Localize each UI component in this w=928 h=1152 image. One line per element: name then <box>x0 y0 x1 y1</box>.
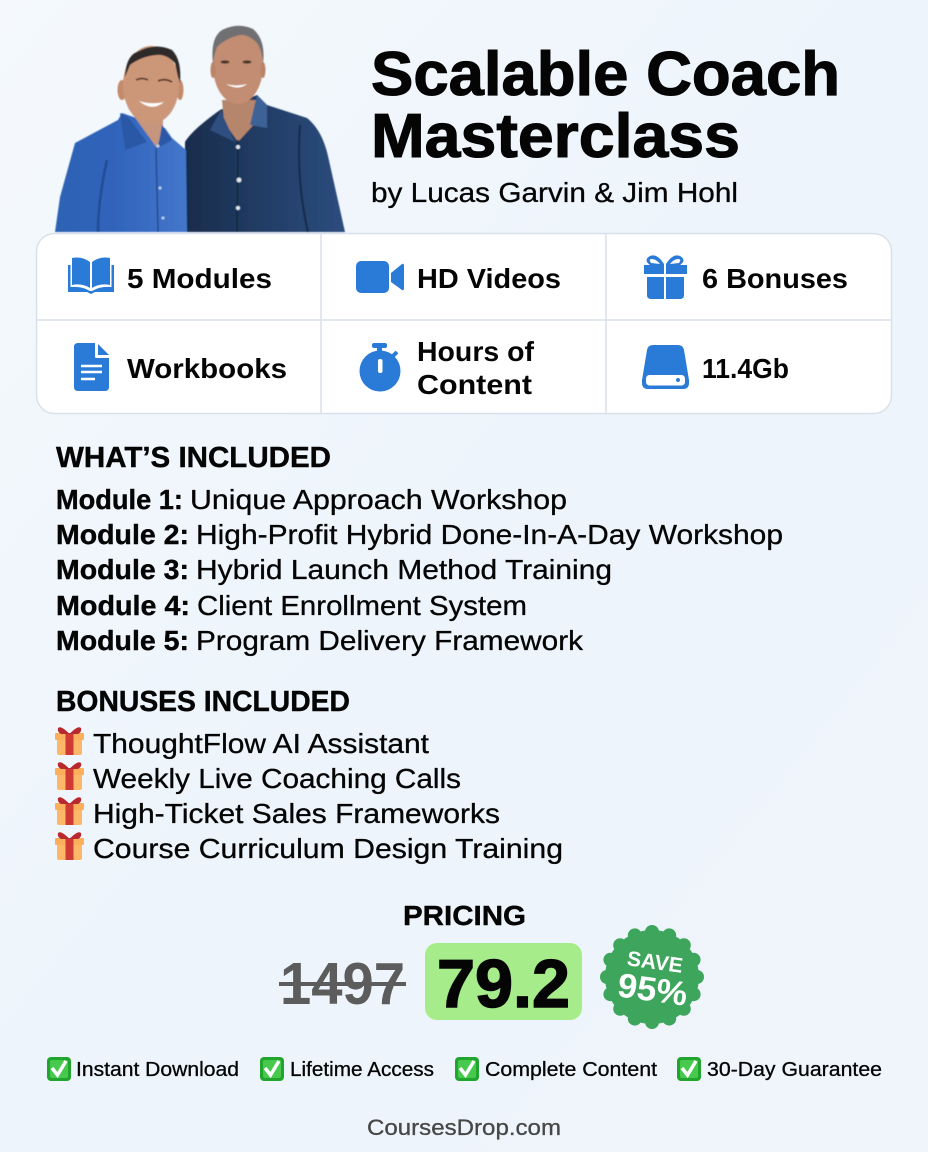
icon: open book <box>68 258 114 294</box>
module list: Client Enrollment System <box>197 590 527 621</box>
icon: hard drive <box>642 345 689 389</box>
footer: site name: CoursesDrop.com <box>367 1115 561 1140</box>
section: bonuses included <box>55 686 563 864</box>
icon: gift <box>55 832 84 860</box>
section: pricing <box>279 900 704 1029</box>
feature: 11.4Gb <box>642 345 789 389</box>
bonus: ThoughtFlow AI Assistant: ThoughtFlow AI Assistant <box>93 728 429 759</box>
feature: 11.4Gb: 11.4Gb <box>702 353 789 384</box>
badge: save 95% <box>600 925 704 1029</box>
guarantee: Lifetime Access: Lifetime Access <box>290 1059 434 1081</box>
feature: 5 Modules: 5 Modules <box>127 263 272 294</box>
badge: save 95%: 95% <box>615 966 690 1014</box>
feature: 5 Modules <box>68 258 272 294</box>
feature: Hours of Content: Hours of <box>417 336 535 367</box>
section: what's included <box>56 442 783 656</box>
heading: bonuses included: BONUSES INCLUDED <box>56 686 350 718</box>
feature: HD Videos <box>356 261 561 294</box>
feature: 6 Bonuses <box>644 255 848 299</box>
module list: Unique Approach Workshop <box>190 484 567 515</box>
guarantee: 30-Day Guarantee: 30-Day Guarantee <box>707 1059 882 1081</box>
feature: Hours of Content <box>360 336 535 400</box>
module list: Module 5: <box>56 625 189 656</box>
module list: Module 3: <box>56 554 189 585</box>
icon: gift <box>55 797 84 825</box>
guarantee: Complete Content: Complete Content <box>485 1059 657 1081</box>
module list: Module 1: <box>56 484 183 515</box>
old price struck through: 1497 <box>280 951 405 1017</box>
feature: Workbooks <box>74 343 287 391</box>
module list: Hybrid Launch Method Training <box>196 554 612 585</box>
icon: gift <box>55 762 84 790</box>
icon: check box <box>677 1057 701 1081</box>
byline: by Lucas Garvin & Jim Hohl <box>371 177 738 208</box>
guarantee: Instant Download: Instant Download <box>76 1059 239 1081</box>
feature: Hours of Content: Content <box>417 369 532 400</box>
icon: gift <box>55 727 84 755</box>
icon: check box <box>260 1057 284 1081</box>
icon: stopwatch <box>360 343 400 392</box>
feature: Workbooks: Workbooks <box>127 353 287 384</box>
title: Scalable Coach <box>371 40 840 109</box>
feature: HD Videos: HD Videos <box>417 263 561 294</box>
icon: check box <box>455 1057 479 1081</box>
icon: document <box>74 343 109 391</box>
guarantee row <box>47 1057 882 1081</box>
title <box>371 40 840 171</box>
module list <box>56 484 783 656</box>
presenter right: Jim Hohl <box>185 26 345 232</box>
presenter left: Lucas Garvin <box>55 46 187 232</box>
module list: Module 4: <box>56 590 190 621</box>
icon: gift box <box>644 255 687 299</box>
module list: High-Profit Hybrid Done-In-A-Day Workshop <box>196 519 783 550</box>
module list: Module 2: <box>56 519 189 550</box>
bonus: High-Ticket Sales Frameworks: High-Ticket Sales Frameworks <box>93 798 500 829</box>
icon: check box <box>47 1057 71 1081</box>
photo of the two presenters <box>55 26 345 232</box>
heading: pricing: PRICING <box>403 900 526 931</box>
heading: what's included: WHAT’S INCLUDED <box>56 442 331 474</box>
icon: video camera <box>356 261 404 293</box>
current price: 79.2 <box>437 946 570 1022</box>
title block <box>371 40 840 208</box>
feature: 6 Bonuses: 6 Bonuses <box>702 263 848 294</box>
badge: save 95%: SAVE <box>626 947 684 978</box>
title: Masterclass <box>371 102 740 171</box>
feature card grid <box>36 234 892 414</box>
bonus: Course Curriculum Design Training: Course Curriculum Design Training <box>93 833 563 864</box>
bonus: Weekly Live Coaching Calls: Weekly Live Coaching Calls <box>93 763 461 794</box>
module list: Program Delivery Framework <box>196 625 583 656</box>
